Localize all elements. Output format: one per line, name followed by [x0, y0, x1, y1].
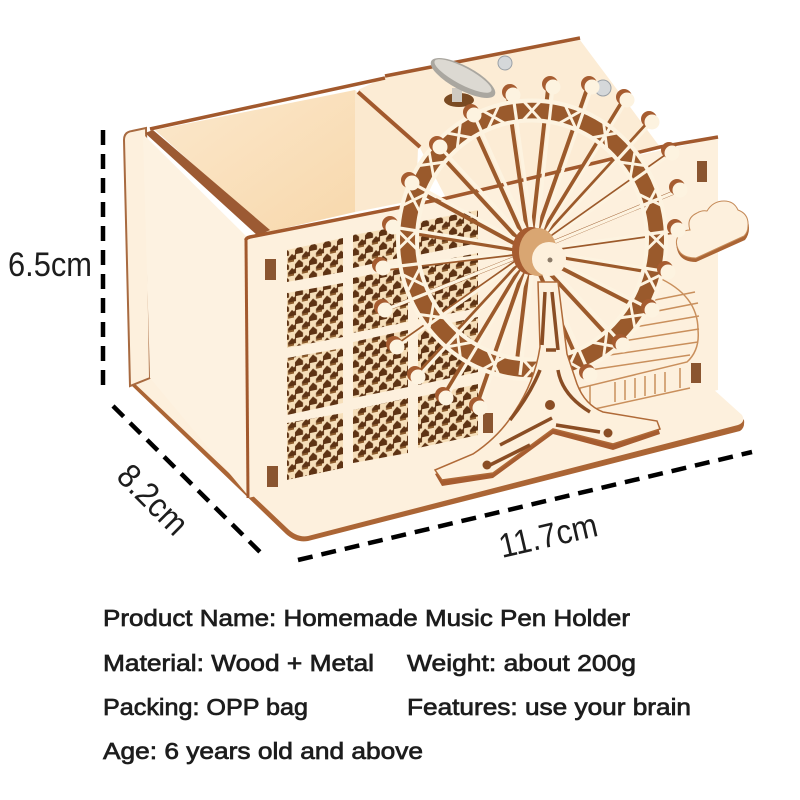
width label: 11.7cm: [495, 506, 601, 566]
back wall of large compartment: [155, 90, 355, 232]
weight: Weight: about 200g: [407, 650, 636, 676]
age: Age: 6 years old and above: [103, 738, 423, 764]
engraved dome building: [572, 277, 699, 410]
packing: Packing: OPP bag: [103, 694, 308, 720]
base edge: [130, 384, 744, 541]
product: wooden music pen holder: [124, 38, 749, 541]
divider wall: [355, 90, 418, 212]
base top: [132, 300, 743, 536]
top surface of music box: [358, 40, 660, 200]
wheel hub: [512, 227, 566, 276]
side wall top edge: [145, 130, 270, 236]
back panel strip: [124, 128, 150, 386]
slots: [265, 161, 707, 487]
screws: [498, 56, 611, 144]
product specifications: [103, 605, 691, 764]
product name: Product Name: Homemade Music Pen Holder: [103, 605, 630, 631]
front panel top edge: [246, 137, 718, 240]
top back edge: [150, 38, 580, 129]
tower stand: [435, 282, 660, 486]
top left edge of music box: [358, 92, 420, 147]
height label: 6.5cm: [8, 246, 92, 284]
left side wall: [143, 134, 250, 498]
wheel spokes: [383, 87, 680, 408]
rim lattice: [398, 101, 666, 379]
lattice panels: [287, 210, 478, 480]
width line: [298, 452, 752, 560]
depth label: 8.2cm: [109, 457, 196, 543]
material: Material: Wood + Metal: [103, 650, 374, 676]
front panel: [246, 138, 718, 498]
gondola balls: [376, 80, 688, 416]
height line: [101, 130, 105, 392]
ball shadows: [372, 76, 685, 413]
silver key: [426, 51, 500, 107]
depth line: [113, 406, 262, 554]
features: Features: use your brain: [407, 694, 691, 720]
front panel left edge: [246, 240, 248, 498]
ferris wheel: [372, 76, 688, 486]
cloud: [676, 201, 749, 262]
wheel shadow spokes: [378, 89, 675, 410]
dashed dimension lines: [103, 130, 752, 560]
